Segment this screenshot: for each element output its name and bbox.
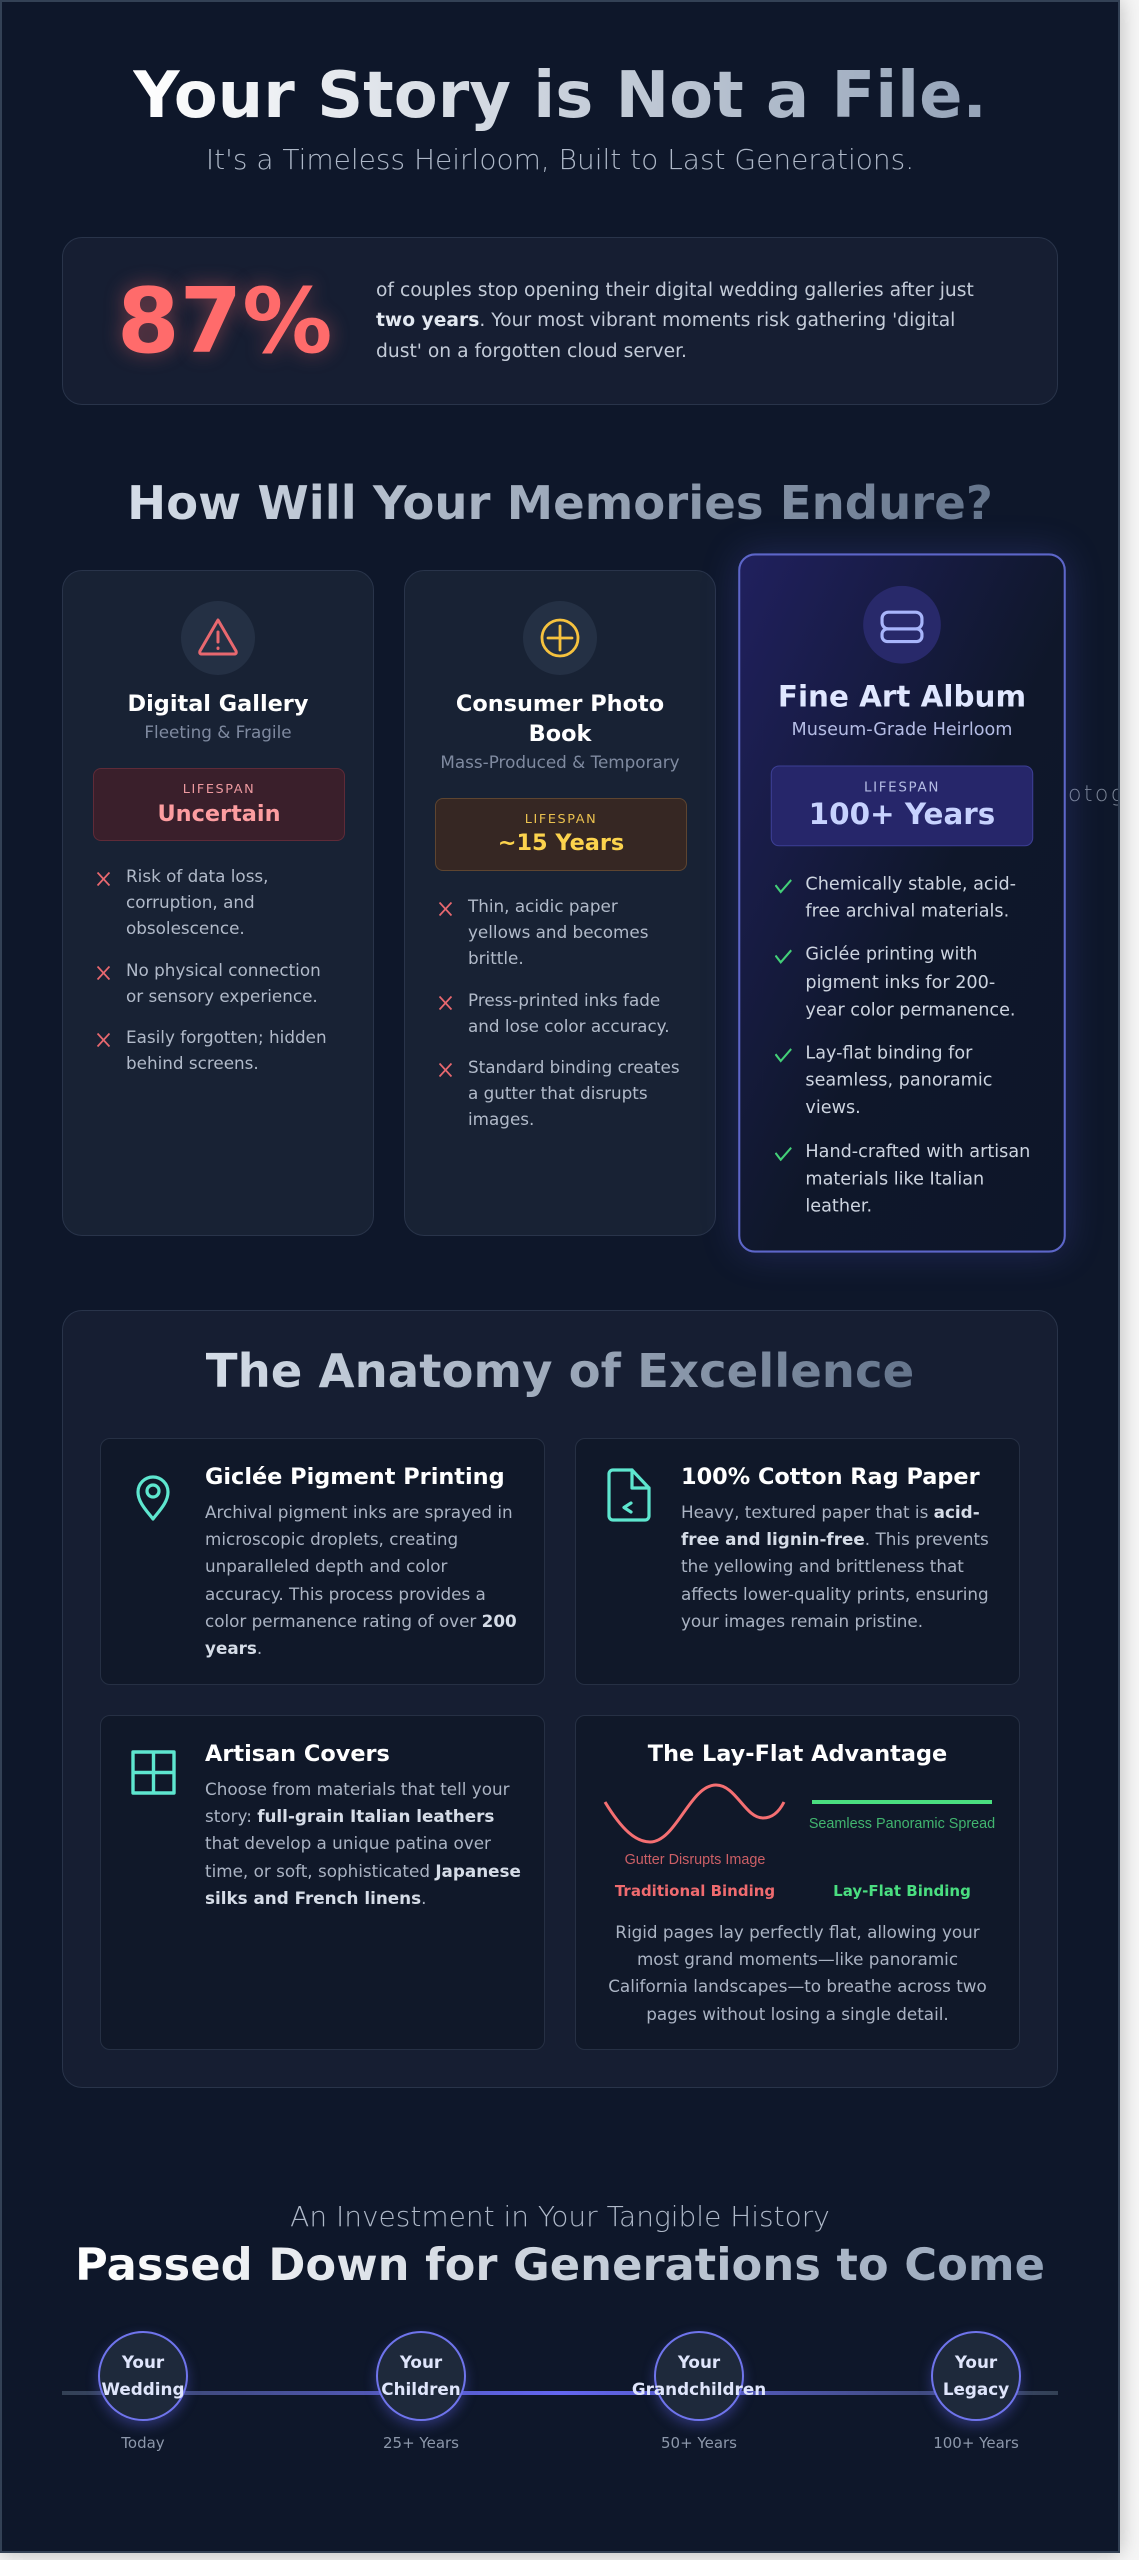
diagram: traditional binding wave bbox=[604, 1784, 786, 1844]
feature text: years. bbox=[205, 1638, 262, 1658]
closing title: Passed Down for Generations to Come bbox=[75, 2238, 1045, 2291]
label: lay-flat: Lay-Flat Binding bbox=[833, 1882, 971, 1900]
list: benefits: Chemically stable, acid- bbox=[805, 873, 1016, 894]
list: drawbacks: No physical connection bbox=[126, 960, 321, 980]
icon: warning triangle bbox=[181, 601, 255, 675]
list: drawbacks: corruption, and bbox=[126, 892, 255, 912]
lifespan: 100+ years bbox=[771, 765, 1033, 846]
feature: lay-flat advantage bbox=[575, 1715, 1020, 2050]
feature title: The Lay-Flat Advantage bbox=[648, 1741, 947, 1767]
list: drawbacks: Thin, acidic paper bbox=[468, 896, 618, 916]
statistic text: two years. Your most vibrant moments risk gathering 'digital bbox=[376, 310, 955, 331]
lifespan value: Uncertain bbox=[157, 801, 281, 827]
list: drawbacks: images. bbox=[468, 1109, 534, 1129]
timeline: Your bbox=[122, 2352, 164, 2372]
feature text: accuracy. This process provides a bbox=[205, 1584, 486, 1604]
list: drawbacks: Easily forgotten; hidden bbox=[126, 1027, 327, 1047]
timeline: Grandchildren bbox=[632, 2379, 766, 2399]
card title: Digital Gallery bbox=[128, 691, 308, 717]
feature: artisan covers bbox=[100, 1715, 545, 2050]
card subtitle: Fleeting & Fragile bbox=[144, 722, 292, 742]
milestone: children bbox=[370, 2330, 472, 2452]
list: benefits: free archival materials. bbox=[805, 900, 1009, 921]
list: benefits: leather. bbox=[805, 1195, 872, 1216]
list: benefits: materials like Italian bbox=[805, 1167, 984, 1188]
feature text: silks and French linens. bbox=[205, 1888, 426, 1908]
list: benefits: Hand-crafted with artisan bbox=[805, 1140, 1030, 1161]
icon: document bbox=[607, 1468, 651, 1522]
statistic text: of couples stop opening their digital wedding galleries after just bbox=[376, 280, 974, 301]
feature text: affects lower-quality prints, ensuring bbox=[681, 1584, 989, 1604]
icon: stacked server bbox=[863, 586, 941, 664]
feature text: your images remain pristine. bbox=[681, 1611, 923, 1631]
subtitle: It's a Timeless Heirloom, Built to Last Generations. bbox=[206, 143, 914, 176]
panel: digital gallery bbox=[62, 570, 374, 1236]
list: drawbacks bbox=[97, 866, 327, 1073]
timeline: Your bbox=[678, 2352, 720, 2372]
list: benefits: seamless, panoramic bbox=[805, 1069, 992, 1090]
timeline: 50+ Years bbox=[661, 2434, 737, 2452]
feature text: microscopic droplets, creating bbox=[205, 1529, 458, 1549]
lifespan label: LIFESPAN bbox=[525, 812, 597, 827]
caption: seamless: Seamless Panoramic Spread bbox=[809, 1816, 995, 1832]
list: drawbacks: Risk of data loss, bbox=[126, 866, 269, 886]
big number: 87% bbox=[117, 269, 332, 374]
feature text: free and lignin-free. This prevents bbox=[681, 1529, 989, 1549]
lay-flat text: pages without losing a single detail. bbox=[646, 2004, 949, 2024]
milestone: grandchildren bbox=[632, 2330, 766, 2452]
card subtitle: Museum-Grade Heirloom bbox=[792, 718, 1012, 739]
feature text: Heavy, textured paper that is acid- bbox=[681, 1502, 980, 1522]
list: benefits: Lay-flat binding for bbox=[805, 1042, 972, 1063]
panel: consumer photo book bbox=[404, 570, 716, 1236]
lifespan value: 100+ Years bbox=[809, 797, 995, 832]
feature text bbox=[205, 1779, 521, 1908]
icon: map pin bbox=[136, 1475, 170, 1521]
icon: circled plus bbox=[523, 601, 597, 675]
card title: Fine Art Album bbox=[778, 679, 1026, 714]
timeline: Your bbox=[400, 2352, 442, 2372]
lifespan value: ~15 Years bbox=[498, 830, 624, 856]
feature text: Archival pigment inks are sprayed in bbox=[205, 1502, 513, 1522]
statistic text bbox=[376, 280, 974, 362]
list: drawbacks: Press-printed inks fade bbox=[468, 990, 660, 1010]
feature text bbox=[205, 1502, 517, 1658]
lifespan label: LIFESPAN bbox=[183, 782, 255, 797]
feature: giclee printing bbox=[100, 1438, 545, 1685]
timeline: Legacy bbox=[943, 2379, 1009, 2399]
heading: anatomy of excellence: The Anatomy of Excellence bbox=[206, 1344, 914, 1398]
feature text: the yellowing and brittleness that bbox=[681, 1556, 964, 1576]
caption: gutter: Gutter Disrupts Image bbox=[625, 1852, 765, 1868]
list: benefits: views. bbox=[805, 1097, 861, 1118]
lifespan label: LIFESPAN bbox=[864, 780, 940, 796]
feature text: color permanence rating of over 200 bbox=[205, 1611, 517, 1631]
feature text: story: full-grain Italian leathers bbox=[205, 1806, 494, 1826]
lay-flat text: California landscapes—to breathe across two bbox=[608, 1976, 987, 1996]
list: benefits: year color permanence. bbox=[805, 998, 1016, 1019]
panel: 87% statistic bbox=[62, 237, 1058, 405]
feature title: Giclée Pigment Printing bbox=[205, 1464, 505, 1490]
feature: cotton rag paper bbox=[575, 1438, 1020, 1685]
timeline bar bbox=[62, 2391, 1058, 2395]
heading: how will your memories endure: How Will Your Memories Endure? bbox=[127, 476, 993, 530]
feature text: time, or soft, sophisticated Japanese bbox=[205, 1861, 521, 1881]
feature text bbox=[681, 1502, 989, 1631]
milestone: wedding bbox=[92, 2330, 194, 2452]
list: benefits: pigment inks for 200- bbox=[805, 971, 995, 992]
feature title: Artisan Covers bbox=[205, 1741, 390, 1767]
feature text: Choose from materials that tell your bbox=[205, 1779, 510, 1799]
timeline: Children bbox=[381, 2379, 461, 2399]
feature text: that develop a unique patina over bbox=[205, 1833, 491, 1853]
list: drawbacks bbox=[439, 896, 680, 1129]
title: Your Story is Not a File. bbox=[133, 59, 987, 133]
timeline: Your bbox=[955, 2352, 997, 2372]
list: drawbacks: and lose color accuracy. bbox=[468, 1016, 670, 1036]
list: drawbacks: or sensory experience. bbox=[126, 986, 318, 1006]
diagram: lay-flat line bbox=[812, 1800, 992, 1804]
lifespan: 15 years bbox=[435, 798, 687, 871]
list: benefits bbox=[775, 873, 1030, 1216]
timeline: 100+ Years bbox=[933, 2434, 1019, 2452]
card subtitle: Mass-Produced & Temporary bbox=[440, 752, 680, 772]
feature title: 100% Cotton Rag Paper bbox=[681, 1464, 980, 1490]
icon: grid bbox=[131, 1750, 176, 1795]
list: drawbacks: yellows and becomes bbox=[468, 922, 648, 942]
list: drawbacks: behind screens. bbox=[126, 1053, 259, 1073]
lay-flat text bbox=[608, 1922, 987, 2024]
timeline: 25+ Years bbox=[383, 2434, 459, 2452]
lay-flat text: most grand moments—like panoramic bbox=[637, 1949, 958, 1969]
lifespan: uncertain bbox=[93, 768, 345, 841]
panel: fine art album bbox=[738, 553, 1066, 1253]
closing subtitle: An Investment in Your Tangible History bbox=[290, 2200, 830, 2233]
milestone: legacy bbox=[924, 2330, 1028, 2452]
label: traditional: Traditional Binding bbox=[615, 1882, 775, 1900]
timeline: Wedding bbox=[101, 2379, 185, 2399]
list: drawbacks: obsolescence. bbox=[126, 918, 245, 938]
lay-flat text: Rigid pages lay perfectly flat, allowing your bbox=[615, 1922, 980, 1942]
list: drawbacks: a gutter that disrupts bbox=[468, 1083, 648, 1103]
timeline: Today bbox=[121, 2434, 165, 2452]
card title: Consumer Photo Book bbox=[456, 691, 664, 747]
panel: anatomy of excellence bbox=[62, 1310, 1058, 2088]
feature text: unparalleled depth and color bbox=[205, 1556, 447, 1576]
list: drawbacks: brittle. bbox=[468, 948, 524, 968]
list: drawbacks: Standard binding creates bbox=[468, 1057, 680, 1077]
list: benefits: Giclée printing with bbox=[805, 943, 977, 964]
statistic text: dust' on a forgotten cloud server. bbox=[376, 341, 687, 362]
